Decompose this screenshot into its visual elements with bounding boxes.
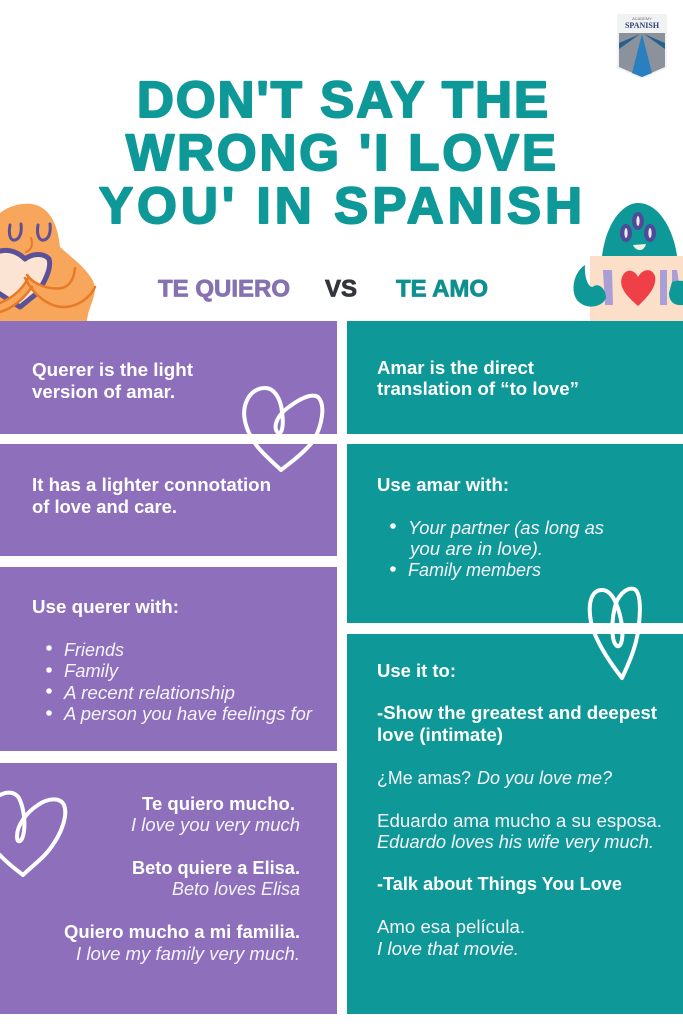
- panel: querer light version: [0, 321, 337, 434]
- panel: querer examples: I love my family very much.: [76, 944, 300, 964]
- panel: use amar with: Use amar with:: [377, 475, 509, 495]
- panel: querer examples: I love you very much: [131, 815, 300, 835]
- panel: amar direct translation: [347, 321, 683, 434]
- panel: lighter connotation: of love and care.: [32, 497, 177, 517]
- panel: querer examples: Beto loves Elisa: [172, 879, 300, 899]
- title: YOU' IN SPANISH: [99, 177, 582, 234]
- panel: use querer with: Friends: [64, 640, 124, 660]
- panel: use it to: Use it to:: [377, 661, 456, 681]
- column headings: [158, 276, 488, 302]
- panel: use it to: ¿Me amas?: [377, 768, 471, 788]
- panel: use querer with: A person you have feelings for: [63, 704, 313, 724]
- panel: use it to: I love that movie.: [377, 939, 519, 959]
- panel: use querer with: Use querer with:: [32, 597, 179, 617]
- panel: amar direct translation: translation of “to love”: [377, 379, 579, 399]
- panel: use amar with: you are in love).: [408, 539, 543, 559]
- panel: use it to: Do you love me?: [477, 768, 612, 788]
- column headings: VS: [325, 276, 357, 302]
- column headings: TE QUIERO: [158, 276, 290, 302]
- logo: Spanish academy shield: ACADEMY: [632, 16, 652, 21]
- icon: heart outline on bottom purple panel: [0, 793, 65, 875]
- panel: use amar with: Your partner (as long as: [408, 518, 604, 538]
- panel: querer light version: version of amar.: [32, 382, 175, 402]
- panel: use it to: -Talk about Things You Love: [377, 874, 622, 894]
- icon: heart outline on first purple panels: [244, 388, 322, 470]
- panel: querer examples: [0, 763, 337, 1014]
- panel: use it to: [347, 634, 683, 1014]
- title: DON'T SAY THE: [137, 71, 548, 128]
- panel: use it to: love (intimate): [377, 725, 503, 745]
- title: WRONG 'I LOVE: [126, 124, 556, 181]
- panel: use it to: Eduardo ama mucho a su esposa.: [377, 811, 662, 831]
- panel: querer light version: Querer is the light: [32, 360, 193, 380]
- title: [99, 71, 582, 234]
- panel: lighter connotation: It has a lighter connotation: [32, 475, 271, 495]
- panel: querer examples: Te quiero mucho.: [142, 794, 295, 814]
- icon: teal character holding a heart sign: [574, 203, 683, 321]
- panel: lighter connotation: [0, 444, 337, 556]
- panel: querer examples: Beto quiere a Elisa.: [132, 858, 300, 878]
- panel: use it to: -Show the greatest and deepest: [377, 703, 657, 723]
- panel: use it to: Amo esa película.: [377, 917, 525, 937]
- column headings: TE AMO: [396, 276, 488, 302]
- panel: amar direct translation: Amar is the direct: [377, 358, 534, 378]
- logo: Spanish academy shield: SPANISH: [625, 21, 660, 30]
- icon: orange character hugging a heart: [0, 204, 95, 321]
- logo: Spanish academy shield: [617, 14, 667, 79]
- panel: use querer with: Family: [64, 661, 119, 681]
- panel: use it to: Eduardo loves his wife very much.: [377, 832, 654, 852]
- panel: use amar with: [347, 444, 683, 623]
- panel: use querer with: A recent relationship: [63, 683, 235, 703]
- panel: querer examples: Quiero mucho a mi familia.: [64, 922, 300, 942]
- panel: use amar with: Family members: [408, 560, 541, 580]
- icon: heart outline on teal panels: [590, 589, 640, 678]
- panel: use querer with: [0, 567, 337, 751]
